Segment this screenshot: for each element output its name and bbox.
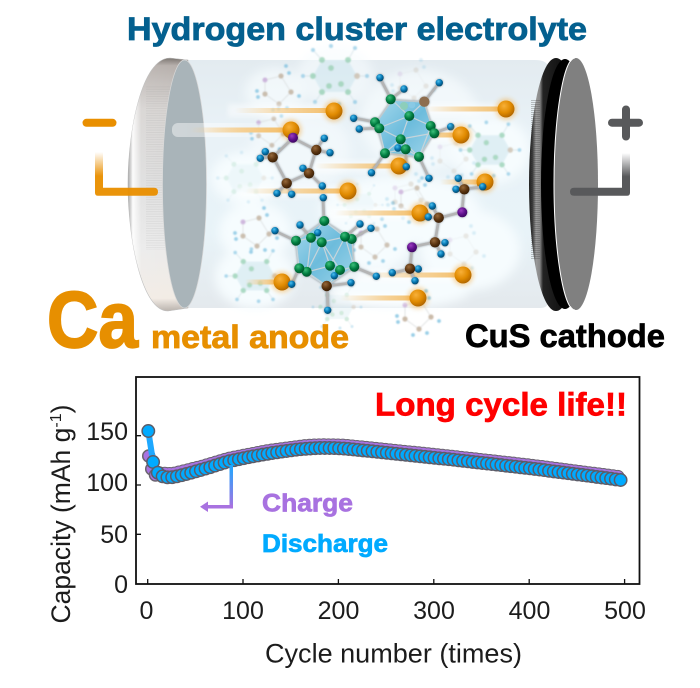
icon: minus terminal: [82, 119, 116, 127]
chain molecule: [389, 175, 486, 284]
glowing trail across left cap: [172, 123, 288, 137]
Ca label: Ca: [47, 275, 138, 364]
upper hydrogen cluster: [350, 74, 454, 182]
soft electrolyte halos: [211, 46, 530, 309]
x axis labels: 0: [140, 597, 153, 625]
x axis labels: 400: [509, 597, 550, 625]
x axis labels: 500: [604, 597, 646, 625]
x axis labels: 100: [222, 597, 264, 625]
discharge series: [142, 425, 627, 486]
negative lead wire: [95, 152, 158, 196]
Ca ions: [272, 98, 516, 308]
x axis title: Cycle number (times): [265, 638, 522, 668]
title: Hydrogen cluster electrolyte: [127, 11, 587, 47]
ring molecule: [257, 133, 334, 198]
icon: plus terminal: [608, 106, 643, 140]
y axis labels: [86, 418, 128, 599]
white glow behind ion trails: [228, 103, 503, 305]
metal anode label: metal anode: [151, 319, 349, 355]
y axis title: Capacity (mAh g: [46, 428, 76, 624]
cylinder body: [185, 60, 548, 308]
charge series: [143, 445, 621, 481]
positive lead wire: [570, 153, 630, 196]
y axis labels: 100: [86, 469, 128, 497]
capacity chart: [46, 377, 646, 668]
left cap: [128, 58, 206, 311]
Charge label: Charge: [262, 490, 353, 518]
right cap: [529, 58, 598, 311]
y axis labels: 50: [100, 521, 128, 549]
Long cycle life callout: Long cycle life!!: [375, 386, 627, 422]
y axis labels: 0: [114, 571, 128, 599]
x axis labels: [140, 597, 646, 625]
arrow pointing to capacity axis: [200, 465, 233, 512]
lower hydrogen cluster: [271, 194, 380, 314]
Discharge label: Discharge: [262, 530, 388, 558]
Ca ion trails: [200, 106, 503, 300]
CuS cathode label: CuS cathode: [465, 318, 665, 354]
x axis labels: 300: [413, 597, 455, 625]
x axis labels: 200: [318, 597, 359, 625]
y axis title: ): [46, 405, 76, 413]
chart frame and ticks: [136, 377, 640, 584]
y axis labels: 150: [86, 418, 128, 446]
battery illustration: [128, 44, 598, 337]
y axis title: -1: [48, 413, 65, 428]
faint background molecules: [216, 44, 521, 337]
blue hydrogen atoms over ions: [288, 163, 410, 288]
